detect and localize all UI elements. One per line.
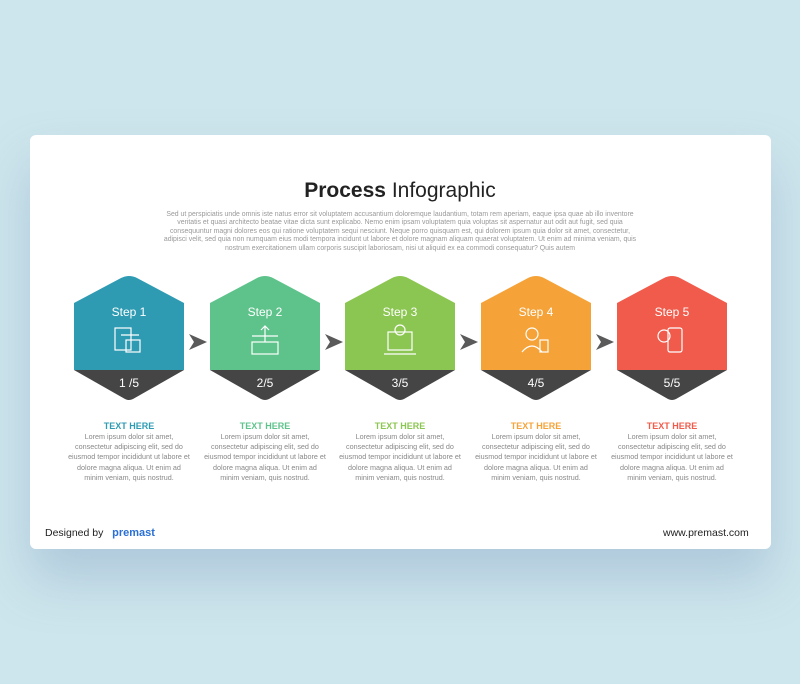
arrows bbox=[189, 334, 614, 350]
step 3: 3/5 bbox=[392, 376, 409, 390]
step 2: Step 2 bbox=[248, 305, 283, 319]
title: Process Infographic bbox=[304, 179, 496, 202]
step 4 bbox=[481, 276, 591, 400]
step 3: Step 3 bbox=[383, 305, 418, 319]
text block 3: Lorem ipsum dolor sit amet, consectetur adipiscing elit, sed do eiusmod tempor incididunt ut labore et dolore magna aliqua. Ut enim ad minim veniam, quis nostrud. bbox=[339, 432, 461, 482]
card bbox=[30, 135, 771, 549]
step 1 bbox=[74, 276, 184, 400]
text block 1: Lorem ipsum dolor sit amet, consectetur adipiscing elit, sed do eiusmod tempor incididunt ut labore et dolore magna aliqua. Ut enim ad minim veniam, quis nostrud. bbox=[68, 432, 190, 482]
step 1: 1 /5 bbox=[119, 376, 139, 390]
step 3 bbox=[345, 276, 455, 400]
step 2: 2/5 bbox=[257, 376, 274, 390]
text block 2: TEXT HERE bbox=[240, 421, 290, 431]
step 5: Step 5 bbox=[655, 305, 690, 319]
text block 1: TEXT HERE bbox=[104, 421, 154, 431]
step 1: Step 1 bbox=[112, 305, 147, 319]
text block 4: TEXT HERE bbox=[511, 421, 561, 431]
text block 5: TEXT HERE bbox=[647, 421, 697, 431]
step 5: 5/5 bbox=[664, 376, 681, 390]
footer: url: www.premast.com bbox=[663, 527, 749, 539]
text block 2: Lorem ipsum dolor sit amet, consectetur adipiscing elit, sed do eiusmod tempor incididunt ut labore et dolore magna aliqua. Ut enim ad minim veniam, quis nostrud. bbox=[204, 432, 326, 482]
step 5 bbox=[617, 276, 727, 400]
step 2 bbox=[210, 276, 320, 400]
text block 4: Lorem ipsum dolor sit amet, consectetur adipiscing elit, sed do eiusmod tempor incididunt ut labore et dolore magna aliqua. Ut enim ad minim veniam, quis nostrud. bbox=[475, 432, 597, 482]
text block 5: Lorem ipsum dolor sit amet, consectetur adipiscing elit, sed do eiusmod tempor incididunt ut labore et dolore magna aliqua. Ut enim ad minim veniam, quis nostrud. bbox=[611, 432, 733, 482]
step 4: Step 4 bbox=[519, 305, 554, 319]
step 4: 4/5 bbox=[528, 376, 545, 390]
intro text: Sed ut perspiciatis unde omnis iste natus error sit voluptatem accusantium doloremque laudantium, totam rem aperiam, eaque ipsa quae ab illo inventore veritatis et quasi architecto beatae vitae dicta sunt explicabo. Nemo enim ipsam voluptatem quia voluptas sit aspernatur aut odit aut fugit, sed quia consequuntur magni dolores eos qui ratione voluptatem sequi nesciunt. Neque porro quisquam est, qui dolorem ipsum quia dolor sit amet, consectetur, adipisci velit, sed quia non numquam eius modi tempora incidunt ut labore et dolore magnam aliquam quaerat voluptatem. Ut enim ad minima veniam, quis nostrum exercitationem ullam corporis suscipit laboriosam, nisi ut aliquid ex ea commodi consequatur? Quis autem bbox=[164, 211, 636, 252]
footer: designed by: Designed by premast bbox=[45, 527, 155, 539]
text block 3: TEXT HERE bbox=[375, 421, 425, 431]
